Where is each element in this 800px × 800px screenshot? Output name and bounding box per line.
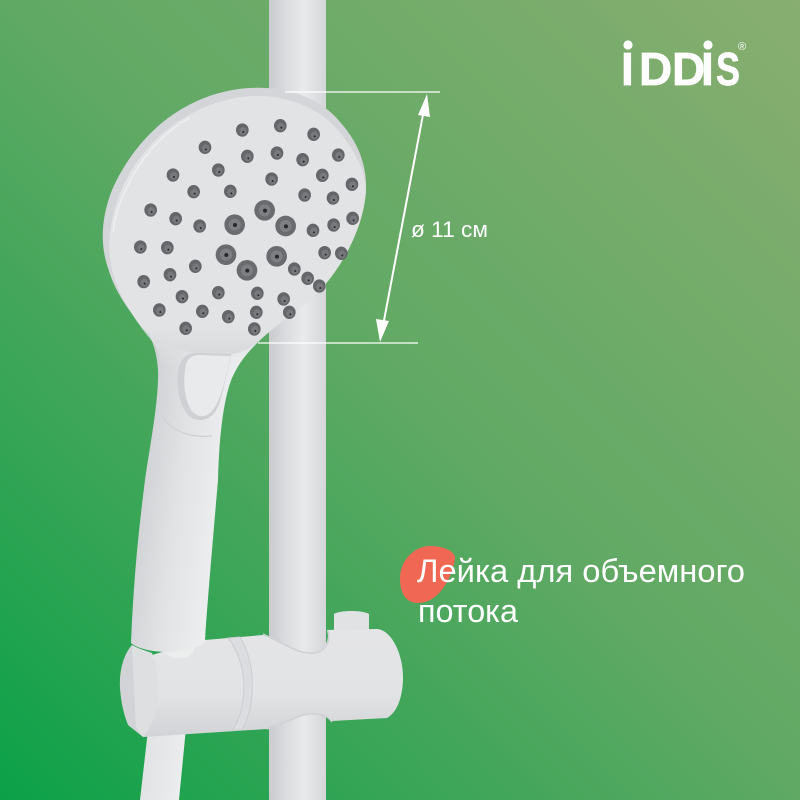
bracket body <box>143 629 403 737</box>
top guide line <box>285 91 440 93</box>
diameter dimension <box>258 92 488 343</box>
caption: потока <box>418 593 518 629</box>
head face <box>109 96 366 372</box>
caption: Лейка для объемного <box>417 553 745 589</box>
rim highlight <box>113 118 190 232</box>
bracket end cap <box>120 645 158 737</box>
double arrow <box>376 94 430 342</box>
iddis logo: D <box>639 43 672 95</box>
saddle rims <box>263 631 332 729</box>
iddis logo: I <box>621 43 634 95</box>
head rim <box>103 88 366 356</box>
spray nozzles <box>134 119 359 336</box>
iddis logo: I <box>701 43 714 95</box>
mode switch button <box>184 355 230 416</box>
diameter label: ø 11 см <box>411 217 488 242</box>
bracket ring <box>228 637 252 730</box>
bottom guide line <box>258 342 418 344</box>
coral accent blob <box>400 546 455 603</box>
handle seam <box>163 417 212 436</box>
bracket knob <box>334 611 369 636</box>
sliding bracket <box>120 611 403 737</box>
slide rail <box>269 0 326 800</box>
handle <box>131 330 262 652</box>
button recess <box>177 353 231 420</box>
hose <box>140 728 186 800</box>
iddis logo: ® <box>738 41 746 53</box>
handle collar <box>164 640 194 658</box>
shower head <box>103 88 366 658</box>
bracket slot strip <box>132 646 165 737</box>
iddis logo: D <box>672 43 705 95</box>
iddis logo <box>621 40 746 95</box>
iddis logo: S <box>716 43 740 95</box>
